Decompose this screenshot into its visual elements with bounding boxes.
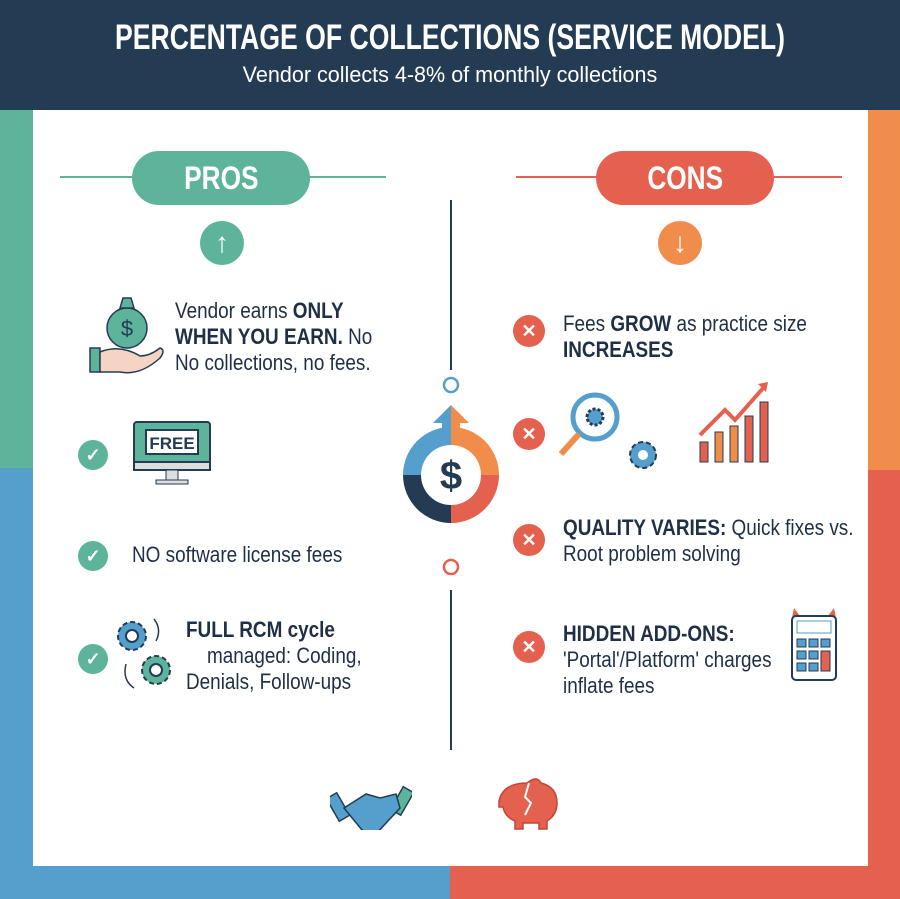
subtitle: Vendor collects 4-8% of monthly collections — [243, 62, 657, 87]
icon: check: ✓ — [85, 445, 101, 465]
icon: check: ✓ — [85, 649, 101, 669]
title: PERCENTAGE OF COLLECTIONS (SERVICE MODEL) — [115, 18, 785, 57]
text: managed: Coding, — [207, 643, 362, 668]
icon: x: ✕ — [521, 530, 537, 550]
text: Root problem solving — [563, 541, 741, 566]
text: NO software license fees — [132, 542, 342, 567]
text: WHEN YOU EARN. No — [175, 324, 372, 349]
icon: check: ✓ — [85, 546, 101, 566]
text — [563, 621, 772, 698]
text: INCREASES — [563, 337, 673, 362]
icon: money bag in hand: $ — [121, 316, 133, 341]
icon: money bag in hand — [89, 297, 164, 374]
text: FULL RCM cycle — [186, 617, 335, 642]
icon: handshake — [330, 786, 412, 830]
con 3 — [513, 515, 854, 566]
icon: x: ✕ — [521, 321, 537, 341]
text — [563, 311, 807, 362]
icon: magnifier gear and bar chart — [558, 382, 768, 469]
icon: monitor FREE — [133, 421, 211, 484]
icon: x: ✕ — [521, 424, 537, 444]
text — [563, 515, 854, 566]
icon: down arrow — [658, 221, 702, 265]
pros heading: PROS — [184, 160, 258, 196]
text — [175, 298, 372, 375]
text: inflate fees — [563, 673, 655, 698]
icon: x — [513, 418, 545, 450]
con 4 — [513, 608, 837, 698]
icon: down arrow: ↓ — [673, 227, 687, 258]
cons heading: CONS — [647, 160, 723, 196]
center divider and dollar icon: $ — [440, 454, 462, 498]
text: Fees GROW as practice size — [563, 311, 807, 336]
header — [0, 0, 900, 110]
pro 3 — [78, 541, 342, 571]
icon: x — [513, 631, 545, 663]
icon: up arrow — [200, 221, 244, 265]
pro 1 — [89, 297, 372, 375]
icon: x: ✕ — [521, 637, 537, 657]
icon: check — [78, 541, 108, 571]
text: Denials, Follow-ups — [186, 669, 351, 694]
icon: calculator — [791, 608, 837, 681]
pro 4 — [78, 617, 362, 694]
text: No collections, no fees. — [175, 350, 371, 375]
icon: check — [78, 440, 108, 470]
icon: gears — [117, 618, 171, 689]
icon: x — [513, 315, 545, 347]
icon: monitor FREE: FREE — [149, 434, 195, 453]
con 1 — [513, 311, 807, 362]
center divider and dollar icon — [403, 200, 499, 750]
text: Vendor earns ONLY — [175, 298, 344, 323]
icon: check — [78, 644, 108, 674]
text — [186, 617, 362, 694]
pro 2 — [78, 421, 211, 484]
text: HIDDEN ADD-ONS: — [563, 621, 735, 646]
icon: x — [513, 524, 545, 556]
con 2 — [513, 382, 768, 469]
icon: up arrow: ↑ — [215, 227, 229, 258]
text: QUALITY VARIES: Quick fixes vs. — [563, 515, 854, 540]
icon: broken piggy bank — [498, 778, 558, 830]
text: 'Portal'/Platform' charges — [563, 647, 772, 672]
